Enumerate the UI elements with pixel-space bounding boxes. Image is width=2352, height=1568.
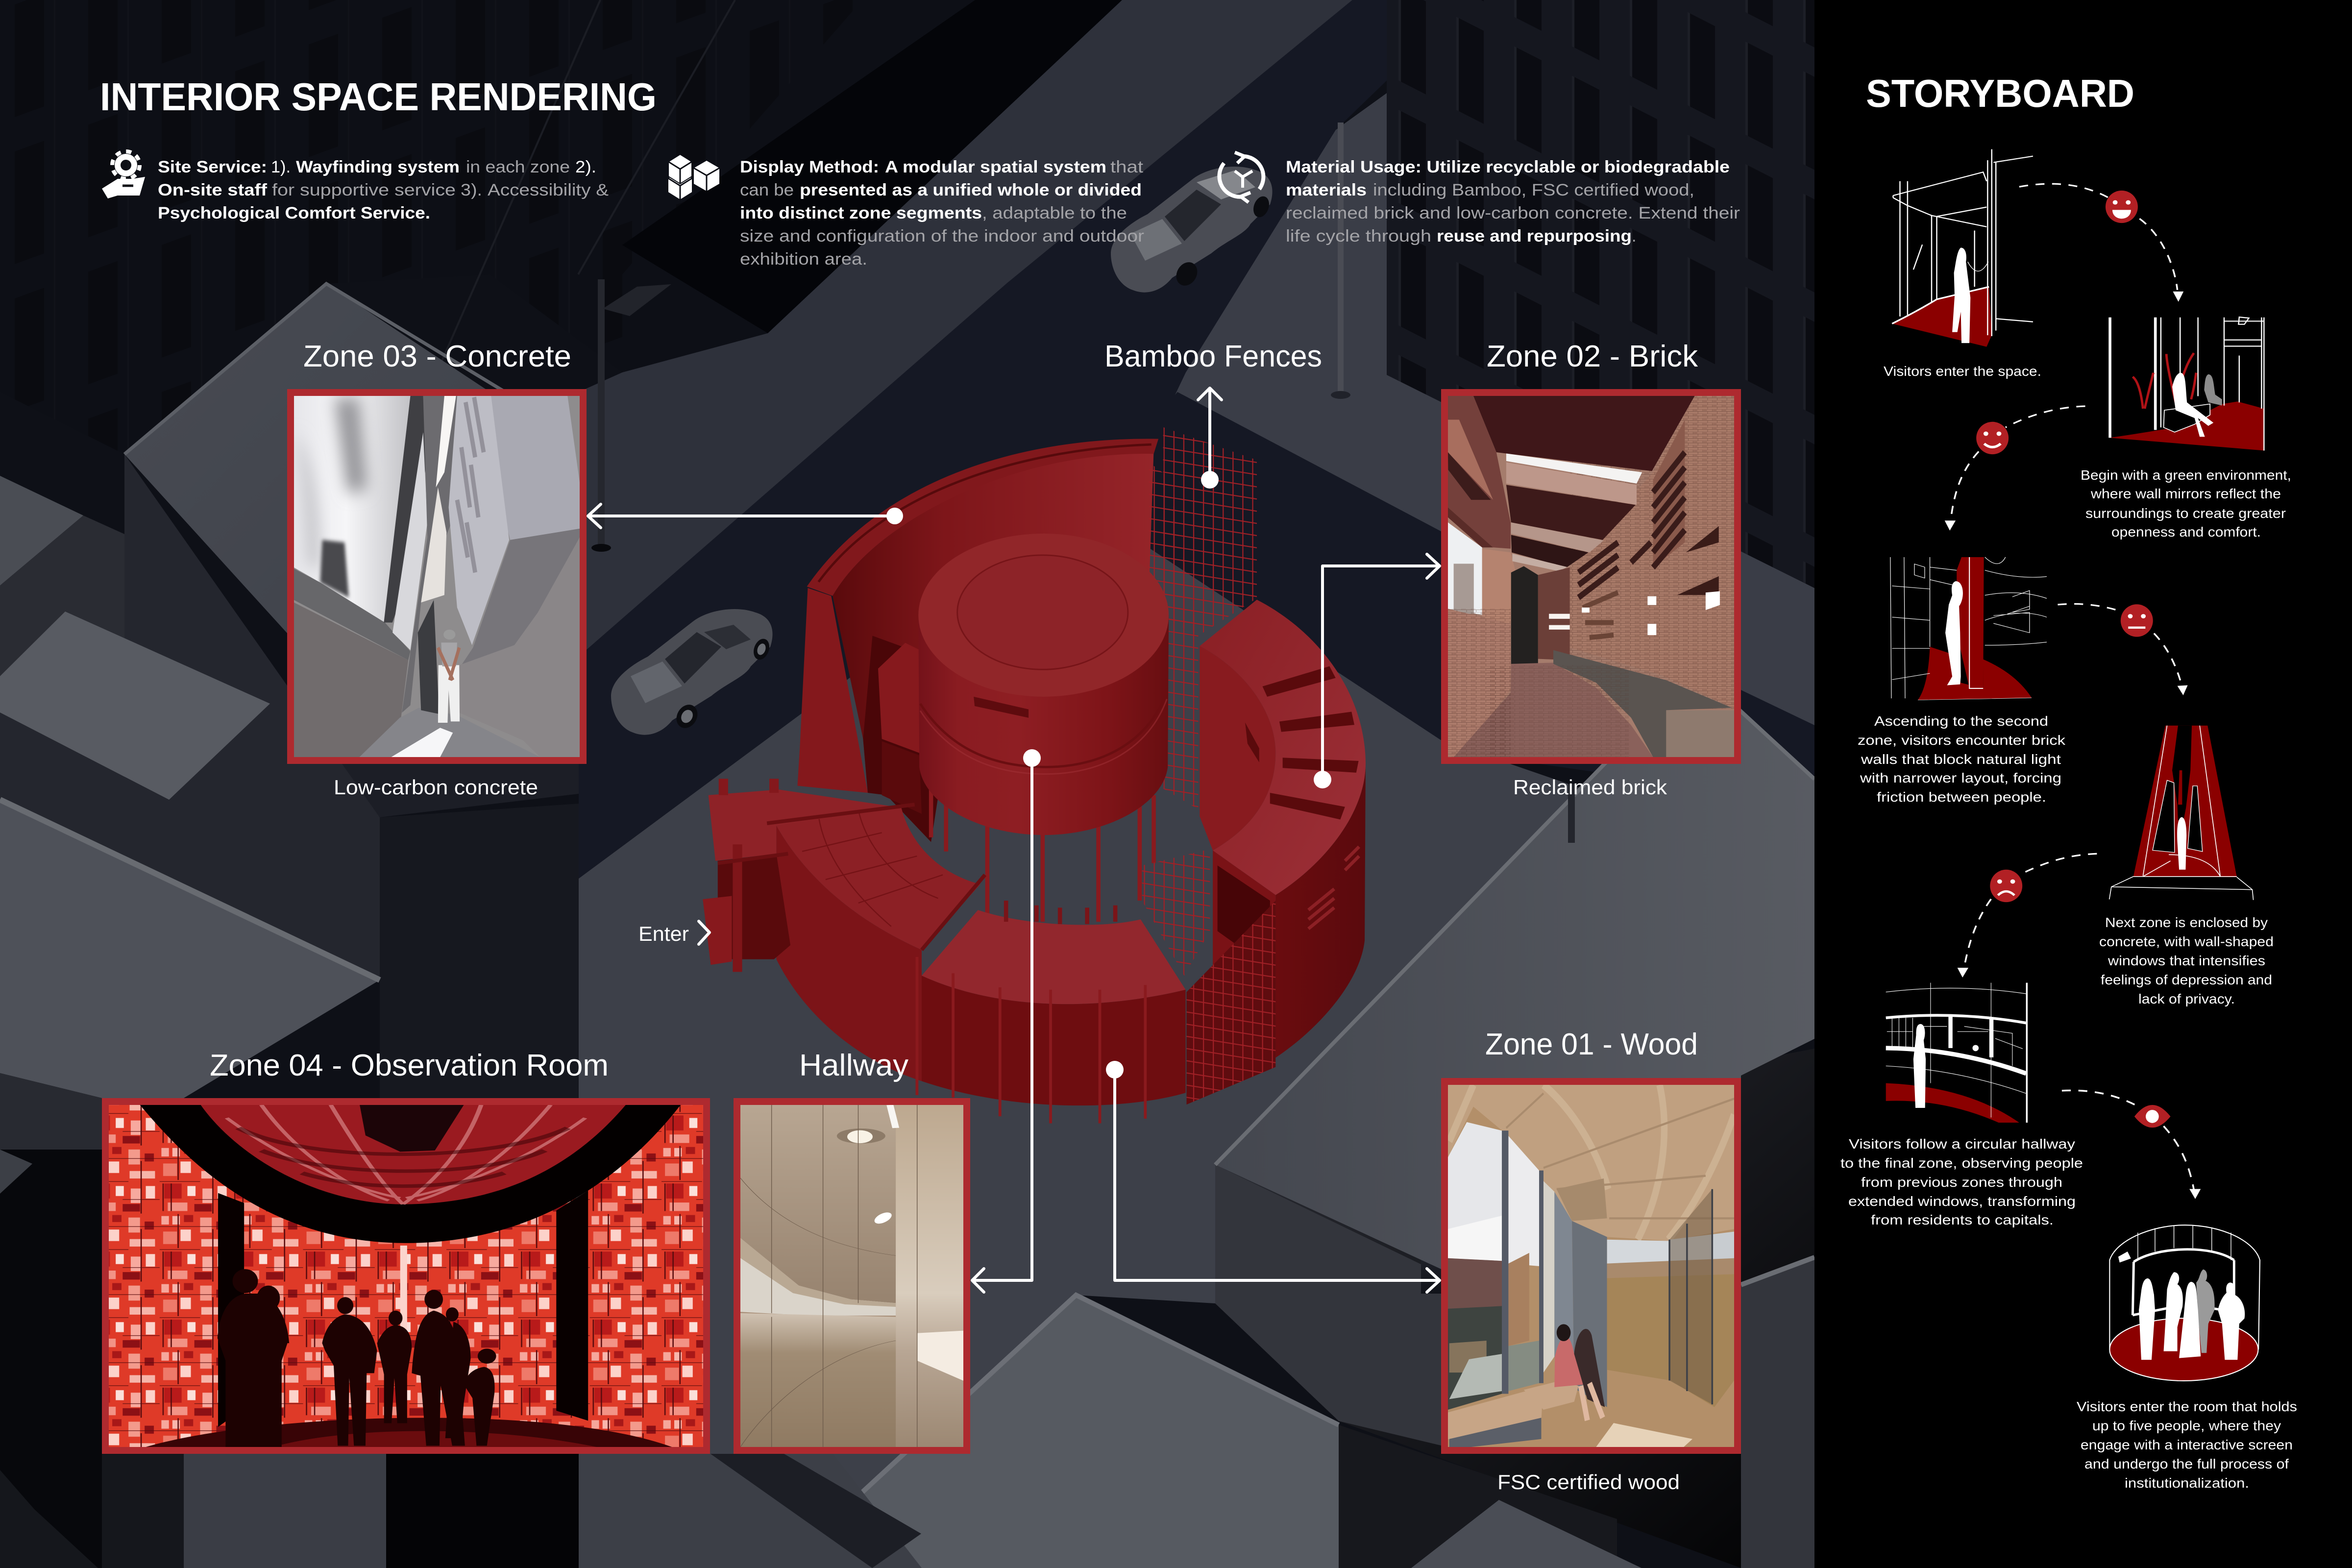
text: site service: Accessibility & <box>488 181 609 199</box>
front segment <box>922 901 1186 1105</box>
text: material usage: Material Usage: Utilize recyclable or biodegradable <box>1286 158 1730 176</box>
caption: step 4: concrete, with wall-shaped <box>2099 934 2274 949</box>
upper right plaza <box>1175 93 1814 725</box>
text: material usage: . <box>1632 227 1636 245</box>
caption: step 5: Visitors follow a circular hallway <box>1849 1136 2075 1152</box>
people silhouettes <box>218 1269 496 1447</box>
panel: storyboard <box>1814 0 2352 1568</box>
caption: step 2: Begin with a green environment, <box>2081 467 2291 483</box>
arrow: to zone 03 <box>588 504 903 528</box>
caption: step 2: surroundings to create greater <box>2085 506 2286 521</box>
arrow: dashed 3 <box>2058 604 2188 695</box>
icon: recycle cycle <box>1219 152 1263 202</box>
arrow: to bamboo fences <box>1198 388 1222 489</box>
arrow: dashed 5 <box>2062 1090 2201 1199</box>
icon group: storyboard part three <box>1886 983 2260 1381</box>
text: site service: 3). <box>461 181 482 199</box>
panel: hallway render <box>734 1098 970 1454</box>
arrow: to zone 01 <box>1106 1061 1440 1292</box>
right block wall <box>1215 1049 1814 1568</box>
central red pavilion model <box>703 427 1366 1123</box>
caption: low-carbon concrete: Low-carbon concrete <box>334 776 538 799</box>
diamond roof <box>0 612 270 800</box>
back curved wall <box>797 439 1158 842</box>
sketch: circular hallway <box>1886 983 2027 1123</box>
sketch: brick corridor <box>1890 557 2047 700</box>
arrow: dashed 2 <box>1945 406 2085 531</box>
caption: step 6: up to five people, where they <box>2092 1418 2281 1433</box>
label: enter: Enter <box>638 922 689 945</box>
caption: step 5: from previous zones through <box>1861 1175 2062 1190</box>
front fence <box>1187 901 1275 1104</box>
lamp post centre <box>1331 122 1350 399</box>
panel: zone 01 wood render <box>1441 1078 1741 1454</box>
text: display method: into distinct zone segments <box>740 204 982 222</box>
vertical front posts <box>917 957 1145 1123</box>
caption: step 5: to the final zone, observing people <box>1840 1155 2083 1171</box>
bamboo fence back <box>1149 427 1257 809</box>
caption: step 6: engage with a interactive screen <box>2081 1437 2293 1452</box>
text: material usage: reuse and repurposing <box>1437 227 1632 245</box>
sketch: entering <box>1892 149 2033 347</box>
heading: zone 01: Zone 01 - Wood <box>1485 1028 1698 1061</box>
mood: observing eye <box>2134 1105 2171 1127</box>
icon group: storyboard part one <box>1892 149 2264 531</box>
caption: step 6 <box>2077 1399 2297 1491</box>
columns under the drum <box>931 781 1154 922</box>
sketch: final room <box>2109 1225 2260 1381</box>
bottom right roof <box>1411 1500 1642 1568</box>
inner fence <box>1142 849 1210 976</box>
text: site service: 2). <box>575 158 596 176</box>
navy road <box>579 0 1814 879</box>
sketch: sitting with plants <box>2109 317 2264 450</box>
text: display method <box>740 158 1144 269</box>
heading: zone 02: Zone 02 - Brick <box>1487 340 1698 373</box>
caption: step 3: friction between people. <box>1877 789 2046 805</box>
text: material usage: reclaimed brick and low-carbon concrete. Extend their <box>1286 204 1740 222</box>
text: site service: in each zone <box>466 158 570 176</box>
heading: zone 03: Zone 03 - Concrete <box>303 340 571 373</box>
text: site service: Wayfinding system <box>296 158 460 176</box>
caption: step 6: institutionalization. <box>2125 1475 2249 1491</box>
side box <box>878 643 919 753</box>
arrow: dashed 4 <box>1958 854 2097 978</box>
dark building top left <box>0 0 1122 454</box>
arrow: dashed 1 <box>2019 184 2183 302</box>
caption: step 6: and undergo the full process of <box>2084 1456 2289 1471</box>
caption: step 5 <box>1840 1136 2083 1227</box>
caption: step 2 <box>2081 467 2291 539</box>
central plaza <box>579 505 1583 1568</box>
caption: step 4: feelings of depression and <box>2101 972 2272 987</box>
city background <box>0 0 1814 1568</box>
text: display method: Display Method: <box>740 158 879 176</box>
text: material usage: materials <box>1286 181 1367 199</box>
text: site service <box>158 158 609 222</box>
bottom centre roof <box>780 1295 1339 1568</box>
caption: step 6: Visitors enter the room that holds <box>2077 1399 2297 1414</box>
title: INTERIOR SPACE RENDERING <box>100 75 657 119</box>
large left roof <box>0 800 380 1098</box>
caption: step 2: where wall mirrors reflect the <box>2090 486 2281 501</box>
text: display method: that <box>1110 158 1144 176</box>
text: material usage <box>1286 158 1740 245</box>
mood: happy <box>2106 191 2138 223</box>
heading: hallway: Hallway <box>799 1049 908 1082</box>
heading: storyboard: STORYBOARD <box>1866 72 2134 115</box>
mood: neutral <box>2121 604 2153 637</box>
caption: step 4 <box>2099 915 2274 1006</box>
far left roof <box>0 476 83 586</box>
text: material usage: including Bamboo, FSC certified wood, <box>1373 181 1694 199</box>
panel: zone 04 observation room render <box>102 1098 710 1454</box>
text: display method: , adaptable to the <box>982 204 1127 222</box>
right block roof <box>1215 670 1814 1269</box>
mood: content <box>1976 422 2009 454</box>
text: site service: Psychological Comfort Service. <box>158 204 430 222</box>
left zone segment <box>776 805 985 1081</box>
text: site service: Site Service: <box>158 158 267 176</box>
arrow: to zone 02 <box>1314 554 1440 788</box>
label: enter <box>638 921 710 945</box>
text: display method: A modular spatial system <box>885 158 1106 176</box>
lamp post right <box>1568 784 1575 843</box>
right zone segment <box>1200 600 1366 1058</box>
caption: reclaimed brick: Reclaimed brick <box>1513 776 1667 799</box>
caption: step 2: openness and comfort. <box>2111 524 2261 539</box>
caption: step 1: Visitors enter the space. <box>1884 364 2041 379</box>
icon group: storyboard part two <box>1890 557 2254 978</box>
dark building top right <box>1387 0 1814 588</box>
caption: step 3 <box>1858 713 2066 805</box>
caption: step 4: Next zone is enclosed by <box>2105 915 2268 930</box>
sketch: concrete corridor <box>2109 726 2254 900</box>
text: display method: can be <box>740 181 794 199</box>
car left <box>611 609 773 735</box>
caption: step 3: walls that block natural light <box>1861 752 2061 767</box>
text: site service: On-site staff <box>158 181 268 199</box>
caption: fsc certified wood: FSC certified wood <box>1497 1470 1680 1494</box>
caption: step 4: lack of privacy. <box>2138 991 2235 1006</box>
text: site service: 1). <box>271 158 291 176</box>
left roof main <box>124 284 539 735</box>
icon: modular cubes <box>668 154 719 199</box>
entrance plates <box>703 779 915 972</box>
icon: gear and hand <box>102 151 145 198</box>
caption: step 3: with narrower layout, forcing <box>1860 770 2061 785</box>
caption: step 4: windows that intensifies <box>2107 953 2265 968</box>
left building front faces <box>0 454 380 980</box>
panel: zone 02 brick render <box>1441 389 1741 764</box>
grey sidewalk strip <box>579 0 1352 657</box>
caption: step 3: Ascending to the second <box>1874 713 2048 729</box>
heading: bamboo fences: Bamboo Fences <box>1104 340 1322 373</box>
text: display method: size and configuration of the indoor and outdoor <box>740 227 1144 245</box>
text: display method: exhibition area. <box>740 250 867 269</box>
text: display method: presented as a unified whole or divided <box>800 181 1142 199</box>
caption: step 5: from residents to capitals. <box>1871 1212 2054 1227</box>
text: material usage: life cycle through <box>1286 227 1431 245</box>
central drum <box>918 534 1169 835</box>
caption: step 3: zone, visitors encounter brick <box>1858 733 2066 748</box>
lamp post left <box>591 279 671 552</box>
mood: sad <box>1990 870 2022 902</box>
text: site service: for supportive service <box>272 181 456 199</box>
car top <box>1111 167 1273 293</box>
arrow: to hallway <box>972 749 1041 1292</box>
caption: step 5: extended windows, transforming <box>1848 1194 2076 1209</box>
panel: zone 03 concrete render <box>287 389 587 764</box>
heading: zone 04: Zone 04 - Observation Room <box>210 1049 609 1082</box>
